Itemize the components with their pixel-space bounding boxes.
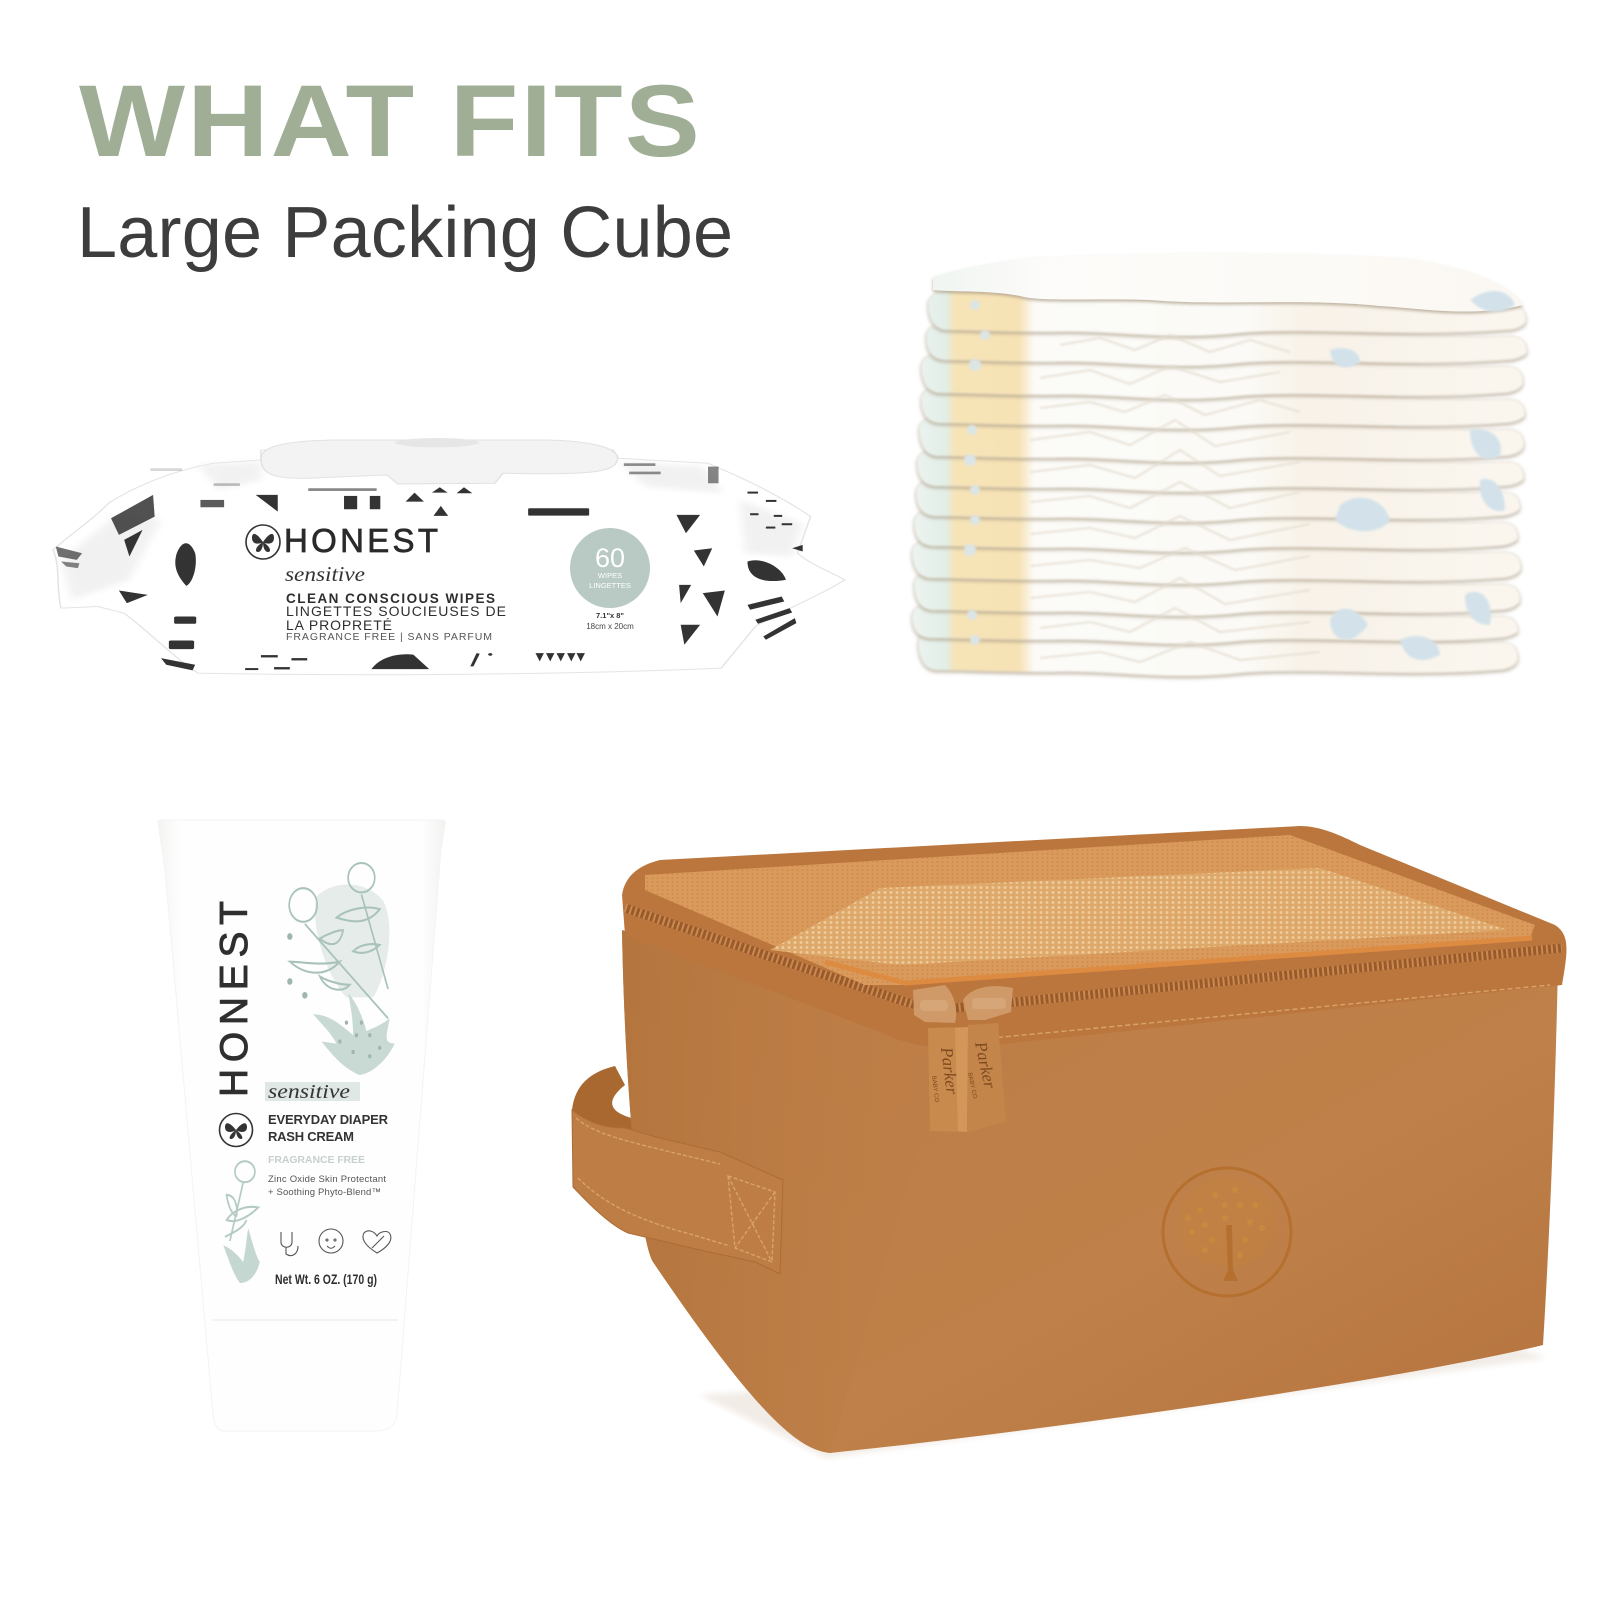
count badge	[570, 528, 650, 608]
flip-top lid	[261, 440, 618, 484]
zipper teeth	[625, 908, 1562, 1009]
product name	[268, 1112, 389, 1144]
left side shading	[622, 930, 950, 1453]
product description: FRAGRANCE FREE | SANS PARFUM	[286, 631, 492, 643]
handle strap	[572, 1110, 783, 1274]
count badge: LINGETTES	[589, 581, 631, 590]
zipper sliders	[913, 985, 1013, 1023]
stacked diaper layers	[912, 290, 1527, 676]
mesh top panel	[645, 835, 1535, 985]
product: large packing cube	[572, 826, 1566, 1458]
embroidered tree logo	[1163, 1168, 1291, 1296]
sensitive script: sensitive	[285, 562, 365, 586]
zipper pull left: Parker	[937, 1045, 962, 1096]
brand name: HONEST	[284, 522, 438, 559]
subtitle: Large Packing Cube	[77, 193, 733, 273]
yellow waistband prints	[964, 300, 990, 645]
cube body	[622, 930, 1558, 1453]
count badge: 60	[595, 543, 625, 573]
botanical illustration	[223, 863, 395, 1283]
wipes package body	[53, 438, 845, 675]
size text: 7.1"x 8"	[596, 611, 624, 620]
stitch line	[950, 985, 1550, 1042]
bottom shadow	[700, 1340, 1545, 1458]
product description: CLEAN CONSCIOUS WIPES	[286, 591, 495, 606]
size text: 18cm x 20cm	[586, 622, 634, 631]
fragrance free: FRAGRANCE FREE	[268, 1154, 365, 1166]
certification icons	[281, 1229, 391, 1256]
black geometric pattern	[56, 463, 803, 670]
wrinkled centre folds	[1030, 335, 1320, 662]
zipper pull right	[966, 1023, 1006, 1132]
ingredients: Zinc Oxide Skin Protectant	[268, 1174, 386, 1185]
product: Honest wipes pack	[53, 438, 845, 675]
ingredients	[268, 1174, 386, 1198]
zipper pull right: Parker	[971, 1039, 1000, 1090]
butterfly logo	[220, 1114, 252, 1146]
product description: LA PROPRETÉ	[286, 617, 392, 633]
mesh front binding	[825, 938, 1532, 983]
blue printed shapes	[1330, 291, 1515, 660]
product: stack of diapers	[912, 254, 1527, 676]
count badge: WIPES	[598, 571, 622, 580]
ingredients: + Soothing Phyto-Blend™	[268, 1187, 381, 1198]
zipper band	[622, 826, 1566, 1048]
zipper pull left	[928, 1027, 968, 1132]
zipper pull left: BABY CO	[930, 1076, 939, 1103]
zipper pull right: BABY CO	[966, 1072, 978, 1100]
size text	[586, 611, 634, 631]
crimp shading	[61, 462, 803, 600]
net weight: Net Wt. 6 OZ. (170 g)	[275, 1271, 377, 1287]
cap seam	[213, 1319, 398, 1321]
mesh see-through centre	[770, 868, 1508, 965]
butterfly logo	[246, 525, 280, 559]
product description	[286, 591, 506, 643]
handle stitching	[576, 1118, 775, 1262]
vertical brand name: HONEST	[213, 901, 256, 1097]
handle loop	[572, 1066, 640, 1210]
product name: EVERYDAY DIAPER	[268, 1112, 389, 1127]
top diaper	[933, 254, 1523, 312]
product description: LINGETTES SOUCIEUSES DE	[286, 603, 506, 619]
product: Honest diaper rash cream tube	[158, 820, 445, 1431]
product name: RASH CREAM	[268, 1129, 354, 1144]
tube body	[158, 820, 445, 1431]
sensitive script with highlight: sensitive	[268, 1081, 350, 1103]
title: WHAT FITS	[79, 64, 702, 178]
